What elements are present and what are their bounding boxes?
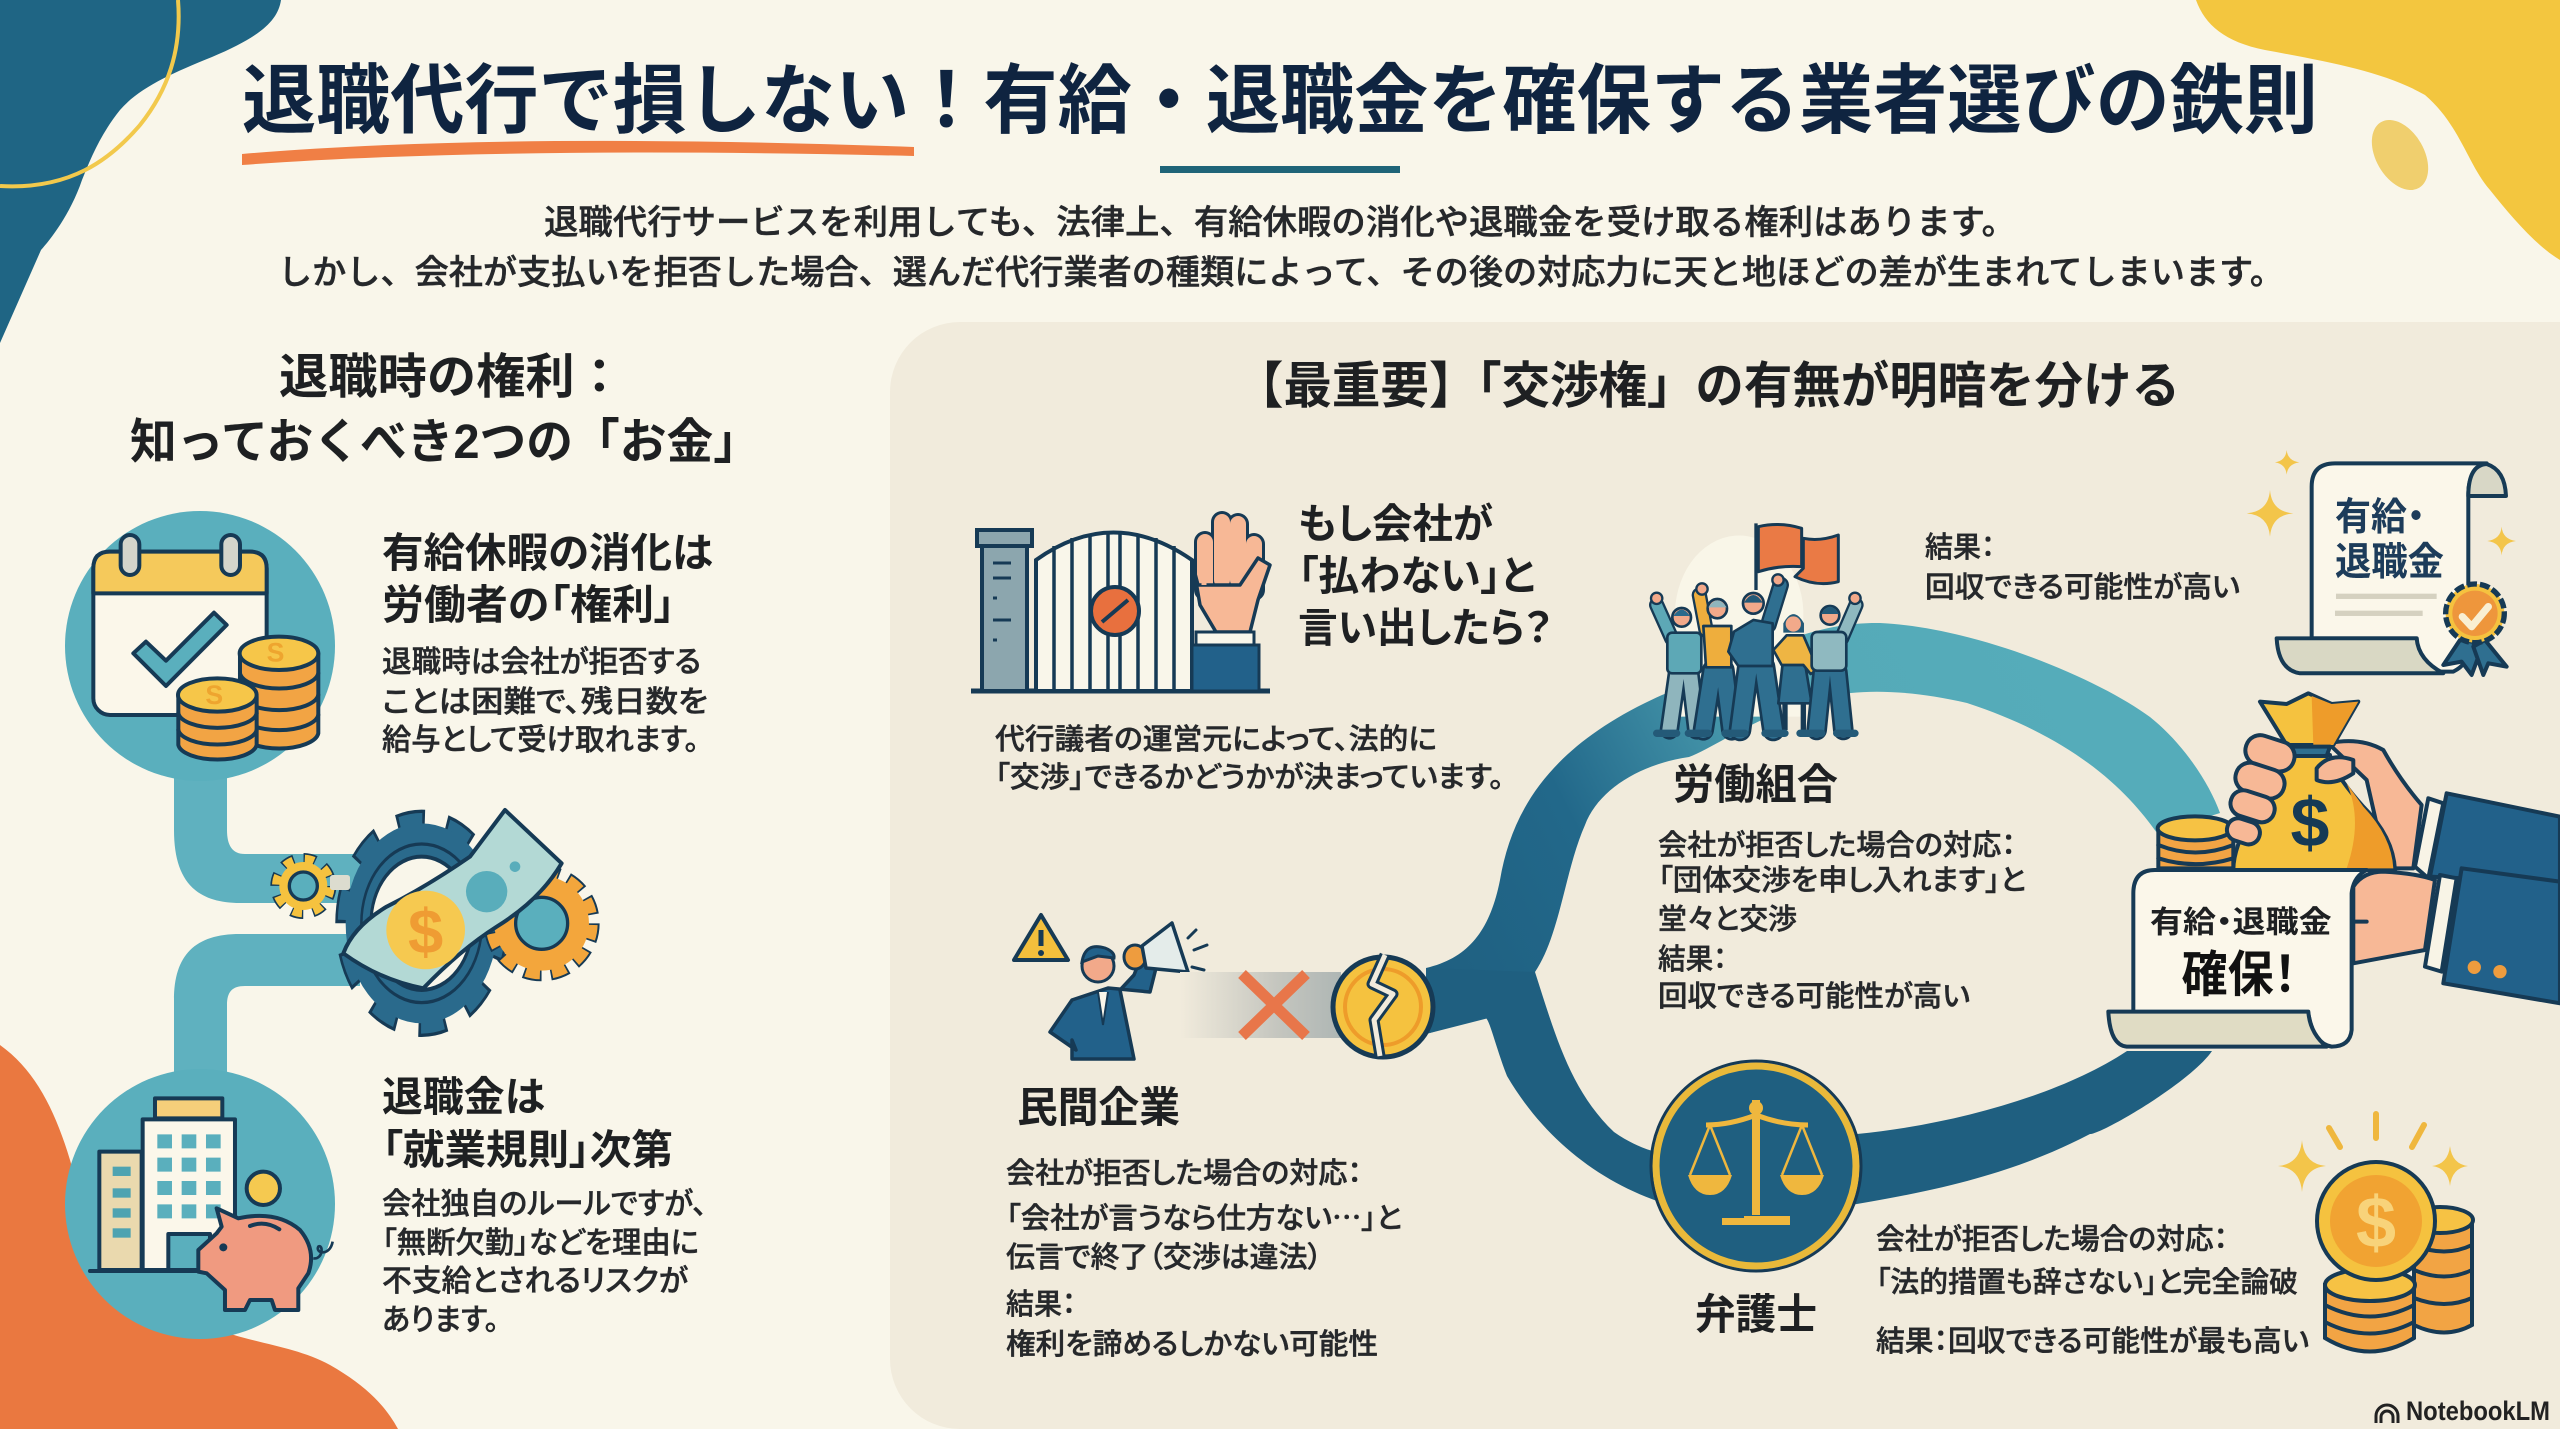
- decorative blob: orange bottom-left: [0, 1045, 398, 1429]
- text block: paid leave: [382, 530, 713, 757]
- blocked band with cross: [1180, 972, 1341, 1038]
- decorative blob: teal top-left: [0, 0, 281, 343]
- text block: lawyer response: 会社が拒否した場合の対応：: [1876, 1223, 2228, 1256]
- icon: warning triangle: [1014, 915, 1068, 960]
- icon: hands with money bag and scroll: 確保！: [2182, 948, 2297, 1003]
- icon: lawyer scales: [1651, 1061, 1861, 1271]
- explanation text: 「交渉」できるかどうかが決まっています。: [995, 761, 1504, 794]
- decorative line: yellow arc: [0, 0, 179, 186]
- text block: paid leave: 有給休暇の消化は: [382, 530, 713, 576]
- text block: severance: [382, 1074, 707, 1337]
- icon: gold coins: [2278, 1114, 2473, 1352]
- circle: severance: [65, 1069, 335, 1339]
- text block: union result: 回収できる可能性が高い: [1925, 571, 2240, 604]
- text block: private company: 権利を諦めるしかない可能性: [1006, 1328, 1378, 1361]
- panel: negotiation rights: [890, 322, 2560, 1429]
- icon: gold coins: $: [2356, 1183, 2396, 1263]
- title: 退職代行で損しない！有給・退職金を確保する業者選びの鉄則: [242, 59, 2318, 144]
- explanation text: 代行議者の運営元によって、法的に: [995, 723, 1437, 756]
- text block: severance: 退職金は: [382, 1074, 545, 1120]
- icon: certificate scroll: [2247, 450, 2516, 675]
- intro text: 退職代行サービスを利用しても、法律上、有給休暇の消化や退職金を受け取る権利はあります。: [544, 204, 2016, 242]
- icon: gears and banknote: $: [408, 897, 443, 967]
- text block: severance: 「就業規則」次第: [382, 1127, 673, 1173]
- text block: labor union: 回収できる可能性が高い: [1658, 980, 1970, 1013]
- intro text: しかし、会社が支払いを拒否した場合、選んだ代行業者の種類によって、その後の対応力に天と地ほどの差が生まれてしまいます。: [278, 254, 2284, 292]
- text block: lawyer title: 弁護士: [1695, 1291, 1817, 1338]
- text block: severance: あります。: [382, 1304, 499, 1337]
- title accent bar: [1160, 166, 1400, 173]
- text block: union result: [1925, 531, 2240, 604]
- icon: hands with money bag and scroll: 有給・退職金: [2150, 906, 2332, 940]
- panel heading: 【最重要】「交渉権」の有無が明暗を分ける: [1235, 358, 2180, 414]
- question text: [1298, 501, 1552, 651]
- text block: lawyer response: 「法的措置も辞さない」と完全論破: [1876, 1266, 2298, 1299]
- title underline: [242, 141, 914, 165]
- text block: private company: 民間企業: [1017, 1084, 1180, 1131]
- intro text: [278, 204, 2284, 292]
- text block: labor union: 堂々と交渉: [1658, 903, 1797, 936]
- text block: labor union: 「団体交渉を申し入れます」と: [1658, 864, 2026, 897]
- question text: 言い出したら？: [1298, 605, 1552, 651]
- text block: private company: 結果：: [1006, 1288, 1076, 1321]
- text block: paid leave: 労働者の「権利」: [382, 582, 675, 628]
- text block: severance: 「無断欠勤」などを理由に: [382, 1227, 699, 1260]
- text block: union result: 結果：: [1925, 531, 1995, 564]
- text block: private company: [1006, 1084, 1402, 1361]
- icon: hands with money bag and scroll: $: [2291, 784, 2329, 862]
- icon: broken coin: [1333, 955, 1433, 1057]
- decorative blob: gold top-right: [2196, 0, 2560, 260]
- icon: closed gate and stop hand: [971, 522, 1270, 691]
- icon: labor union group: [1651, 523, 1861, 733]
- icon: calendar and coins: [93, 535, 318, 760]
- text block: lawyer response: 結果：回収できる可能性が最も高い: [1876, 1325, 2309, 1358]
- connector path: left column: [174, 770, 360, 1080]
- icon: hands with money bag and scroll: [2108, 693, 2560, 1047]
- question text: 「払わない」と: [1298, 553, 1535, 599]
- left heading: 知っておくべき2つの「お金」: [130, 416, 760, 469]
- left heading: 退職時の権利：: [279, 351, 624, 404]
- road: upper branch: [1426, 623, 2220, 1034]
- icon: gears and banknote: [276, 810, 592, 1025]
- decorative blob: light gold: [2360, 110, 2440, 200]
- icon: certificate scroll: 退職金: [2335, 541, 2444, 584]
- left heading: [130, 351, 760, 469]
- text block: labor union: 労働組合: [1673, 761, 1838, 808]
- text block: private company: 会社が拒否した場合の対応：: [1006, 1157, 1362, 1190]
- text block: paid leave: ことは困難で、残日数を: [382, 686, 708, 719]
- question text: もし会社が: [1298, 501, 1493, 547]
- text block: private company: 伝言で終了（交渉は違法）: [1006, 1241, 1322, 1274]
- icon: calendar and coins: S: [267, 638, 284, 668]
- circle: paid leave: [65, 511, 335, 781]
- icon: building and piggy bank: [90, 1098, 333, 1310]
- text block: labor union: [1658, 761, 2026, 1013]
- text block: paid leave: 給与として受け取れます。: [382, 724, 699, 757]
- icon: certificate scroll: 有給・: [2335, 496, 2425, 539]
- icon: calendar and coins: S: [205, 680, 223, 710]
- text block: private company: 「会社が言うなら仕方ない…」と: [1006, 1195, 1402, 1237]
- text block: labor union: 結果：: [1658, 943, 1727, 976]
- text block: severance: 会社独自のルールですが、: [382, 1188, 707, 1221]
- text block: labor union: 会社が拒否した場合の対応：: [1658, 829, 2016, 862]
- icon: person with megaphone: [1050, 923, 1207, 1059]
- road: lower branch: [1426, 968, 2212, 1205]
- text block: lawyer response: [1876, 1223, 2309, 1358]
- explanation text: [995, 723, 1504, 794]
- text block: paid leave: 退職時は会社が拒否する: [382, 646, 701, 679]
- text block: severance: 不支給とされるリスクが: [382, 1265, 689, 1298]
